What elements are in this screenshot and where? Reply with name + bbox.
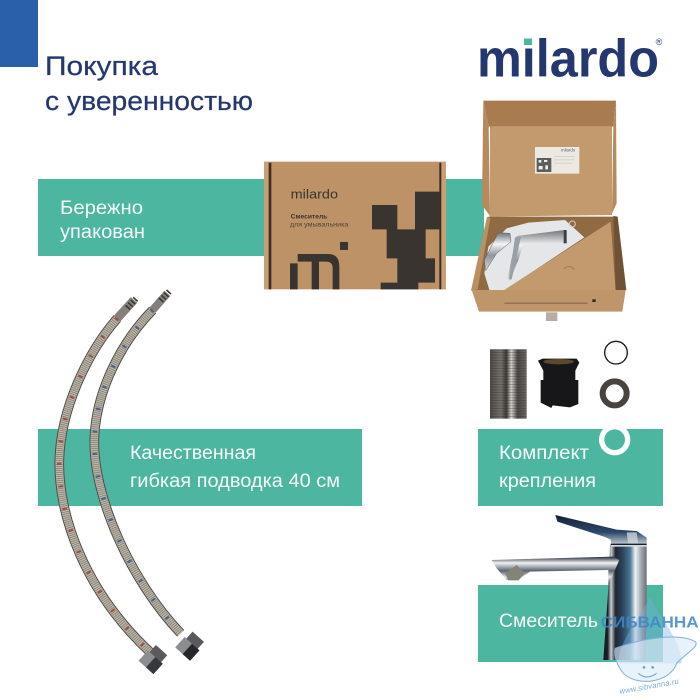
chrome faucet	[492, 515, 647, 660]
thin black O-ring	[605, 341, 627, 364]
watermark: СИБВАННА	[601, 597, 699, 696]
open kraft box: lid	[482, 101, 617, 217]
watermark: СИБВАННА: www.sibvanna.ru	[619, 677, 680, 696]
threaded sleeve	[490, 349, 527, 419]
hose: blue	[94, 291, 206, 661]
teal band: mounting kit: Комплект	[499, 443, 589, 464]
teal band: mounting kit	[478, 429, 663, 506]
cardboard insert	[500, 222, 616, 293]
teal band: packaging	[38, 179, 484, 256]
teal band: packaging: Бережно	[60, 198, 143, 219]
teal band: faucet	[478, 585, 663, 662]
title: Покупка	[45, 51, 159, 81]
instruction label with QR code: milardo	[561, 147, 576, 152]
closed kraft box: milardo	[291, 187, 338, 202]
title	[45, 51, 253, 116]
teal band: packaging: упакован	[60, 222, 145, 243]
teal band: mounting kit: крепления	[499, 471, 596, 492]
watermark: СИБВАННА: СИБВАННА	[601, 614, 699, 631]
teal band: hoses: гибкая подводка 40 см	[130, 471, 340, 492]
hose: red	[59, 298, 169, 674]
logo: milardo: ®	[656, 37, 663, 47]
mounting kit parts	[490, 341, 628, 453]
closed kraft box: для умывальника	[290, 223, 349, 229]
blue corner block	[0, 0, 38, 67]
title: с уверенностью	[45, 86, 253, 116]
logo: milardo: milardo	[477, 30, 659, 88]
dark washer	[603, 381, 627, 405]
closed kraft box: Смеситель	[291, 214, 327, 221]
paper tag loop	[569, 221, 575, 227]
black plastic nut	[538, 359, 579, 408]
flexible hoses	[59, 291, 206, 674]
open kraft box: tray with faucet	[471, 216, 626, 321]
front panel	[472, 290, 626, 312]
white ring	[602, 427, 628, 453]
teal band: hoses: Качественная	[130, 443, 256, 464]
faucet in box	[484, 230, 567, 281]
teal band: faucet: Смеситель	[499, 611, 598, 632]
teal band: hoses	[38, 429, 362, 506]
tissue paper	[484, 220, 584, 293]
closed kraft box	[264, 162, 446, 289]
